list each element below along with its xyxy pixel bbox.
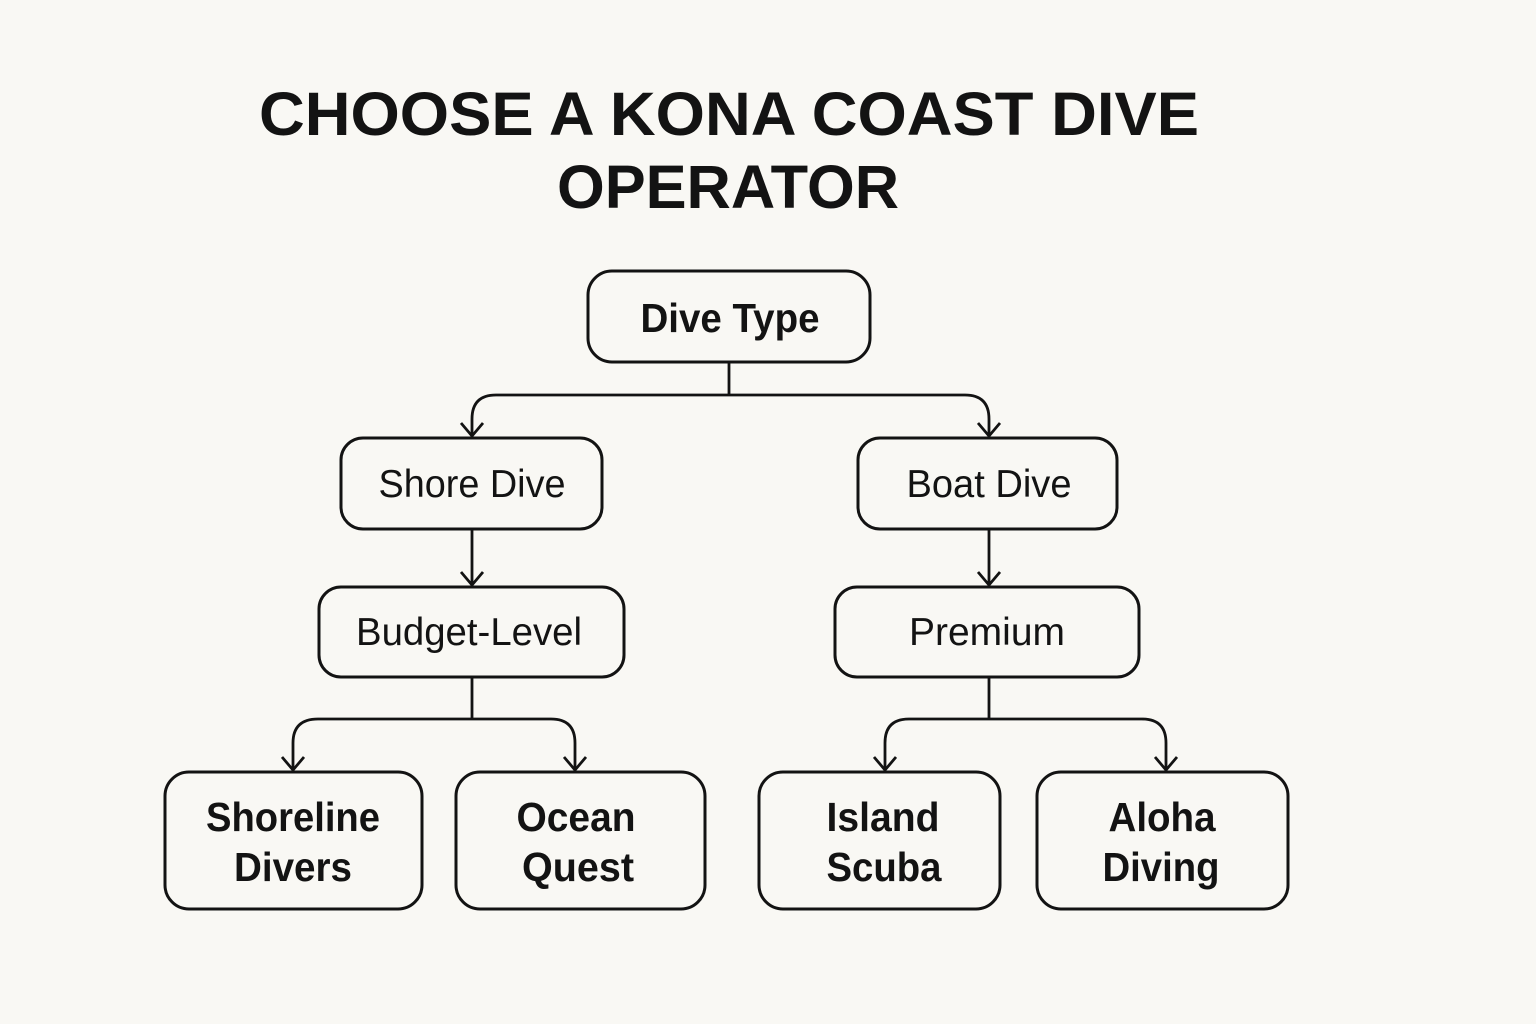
node: Aloha Diving: Diving <box>1102 844 1220 890</box>
node: Shoreline Divers <box>165 772 422 909</box>
node: Dive Type: Dive Type <box>640 295 820 341</box>
node: Dive Type <box>588 271 870 362</box>
title <box>259 80 1199 221</box>
connector: Premium to operators <box>874 677 1177 770</box>
node: Budget-Level: Budget-Level <box>356 611 582 654</box>
node: Aloha Diving <box>1037 772 1288 909</box>
connector: Budget-Level to operators <box>282 677 586 770</box>
node: Shore Dive <box>341 438 602 529</box>
node: Premium: Premium <box>909 611 1065 654</box>
node: Shore Dive: Shore Dive <box>378 463 566 506</box>
connector: Dive Type to Shore Dive and Boat Dive <box>461 362 1000 436</box>
node: Ocean Quest: Quest <box>522 844 634 890</box>
node: Shoreline Divers: Divers <box>234 844 352 890</box>
node: Ocean Quest <box>456 772 705 909</box>
node: Boat Dive <box>858 438 1117 529</box>
node: Premium <box>835 587 1139 677</box>
node: Boat Dive: Boat Dive <box>906 463 1072 506</box>
title: OPERATOR <box>557 153 899 221</box>
arrow: Boat Dive to Premium <box>978 529 1000 585</box>
node: Island Scuba: Island <box>826 794 940 840</box>
node: Island Scuba <box>759 772 1000 909</box>
node: Island Scuba: Scuba <box>826 844 943 890</box>
node: Shoreline Divers: Shoreline <box>206 794 380 840</box>
node: Budget-Level <box>319 587 624 677</box>
arrow: Shore Dive to Budget-Level <box>461 529 483 585</box>
node: Ocean Quest: Ocean <box>516 794 636 840</box>
node: Aloha Diving: Aloha <box>1108 794 1217 840</box>
title: CHOOSE A KONA COAST DIVE <box>259 80 1199 148</box>
